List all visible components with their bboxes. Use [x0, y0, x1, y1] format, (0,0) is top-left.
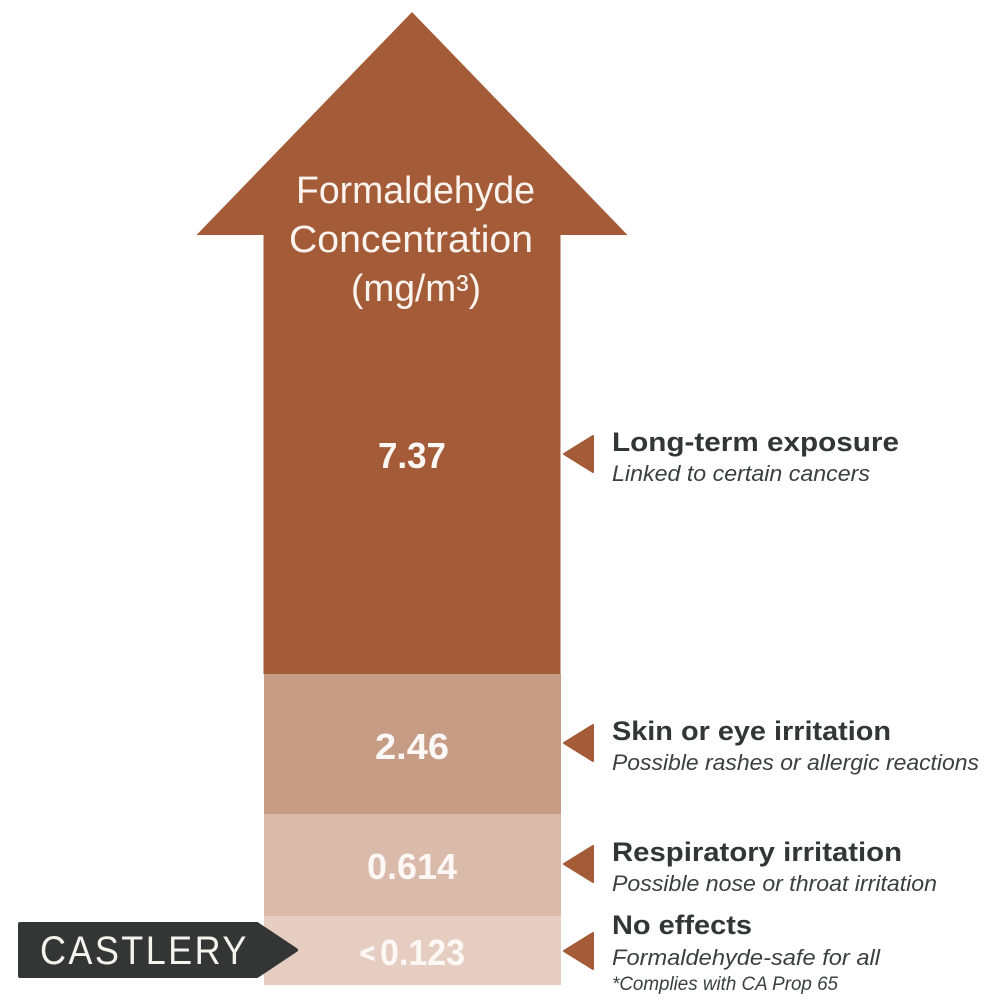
- description: Linked to certain cancers: [612, 461, 870, 486]
- chart title: [289, 170, 535, 310]
- brand name: CASTLERY: [40, 929, 249, 973]
- icon: pointer arrow: [564, 846, 593, 882]
- segment: 7.37 arrow head and shaft: [196, 12, 628, 674]
- icon: pointer arrow: [564, 725, 593, 761]
- callout: skin or eye irritation: [564, 716, 979, 775]
- value: 2.46: 2.46: [375, 726, 449, 767]
- footnote: *Complies with CA Prop 65: [612, 974, 838, 995]
- callout: respiratory irritation: [564, 837, 937, 896]
- value: 7.37: 7.37: [378, 435, 446, 476]
- heading: Respiratory irritation: [612, 837, 902, 867]
- description: Possible nose or throat irritation: [612, 871, 937, 896]
- value: less than 0.123: <: [360, 938, 375, 968]
- chart title: Concentration: [289, 219, 533, 261]
- icon: pointer arrow: [564, 436, 593, 472]
- segment: 0.614: [264, 814, 561, 916]
- description: Formaldehyde-safe for all: [612, 945, 881, 970]
- heading: No effects: [612, 910, 752, 940]
- heading: Skin or eye irritation: [612, 716, 891, 746]
- callout: no effects: [564, 910, 881, 995]
- heading: Long-term exposure: [612, 427, 899, 457]
- value: less than 0.123: 0.123: [380, 932, 465, 973]
- segment: 2.46: [264, 674, 561, 814]
- description: Possible rashes or allergic reactions: [612, 750, 979, 775]
- tag shape: [20, 924, 296, 976]
- arrow chart: formaldehyde concentration scale: [196, 12, 628, 985]
- segment: below 0.123: [264, 916, 561, 985]
- brand tag: Castlery: [20, 924, 296, 976]
- chart title: Formaldehyde: [296, 170, 535, 212]
- icon: pointer arrow: [564, 933, 593, 969]
- value: 0.614: 0.614: [367, 846, 457, 887]
- chart title: (mg/m³): [351, 268, 481, 310]
- callout: long-term exposure: [564, 427, 899, 486]
